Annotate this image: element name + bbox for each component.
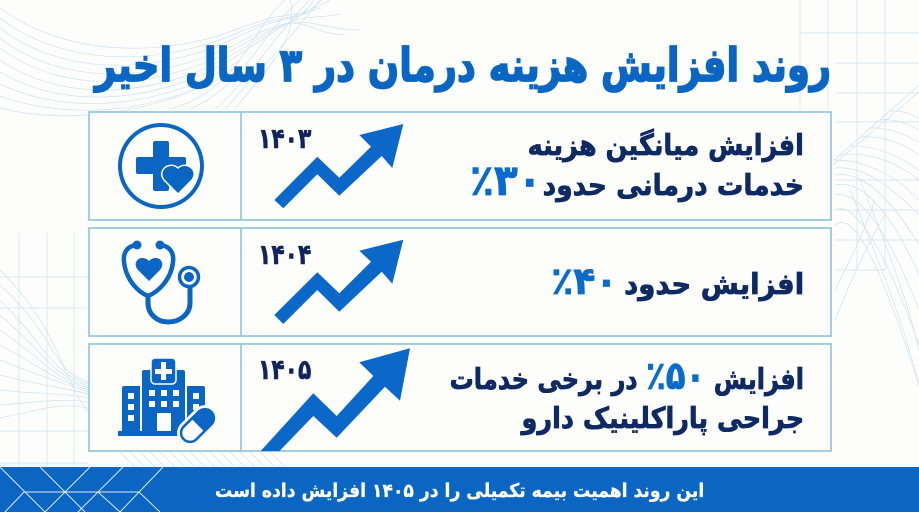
text: row 2: افزایش حدود [624, 267, 804, 301]
panel: 1403 [88, 111, 832, 221]
text: row 3 line 1: ٪۵۰ [646, 354, 705, 399]
text: row 2: ٪۴۰ [551, 259, 617, 303]
text: row 1 line 1: افزایش میانگین هزینه [528, 128, 804, 162]
footer band [0, 467, 919, 512]
text: row 3 line 2: جراحی پاراکلینیک دارو [521, 401, 804, 435]
text: row 3 line 1: افزایش در برخی خدمات [450, 362, 804, 396]
title: روند افزایش هزینه درمان در ۳ سال اخیر [95, 38, 831, 92]
year 1404: ۱۴۰۴ [258, 238, 311, 271]
panel: 1404 [88, 227, 832, 337]
year 1403: ۱۴۰۳ [258, 122, 311, 155]
year 1405: ۱۴۰۵ [258, 353, 311, 386]
text: row 1 line 2: خدمات درمانی حدود [543, 168, 804, 202]
text: row 2 [551, 259, 804, 303]
footer text: این روند اهمیت بیمه تکمیلی را در ۱۴۰۵ افزایش داده است [215, 480, 704, 502]
text: row 1 line 2: ٪۳۰ [470, 156, 542, 206]
text: row 1 line 2 [470, 156, 804, 206]
panel: 1405 [88, 343, 832, 452]
